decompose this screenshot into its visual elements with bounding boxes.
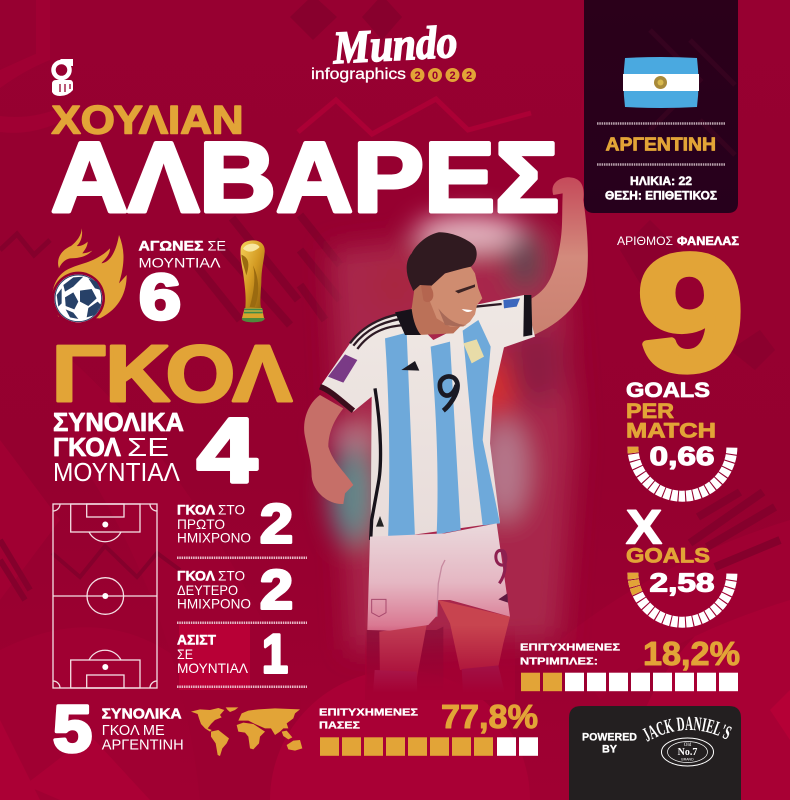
top hero: name bbox=[52, 59, 244, 142]
stat: expected goals: GOALS bbox=[626, 545, 710, 568]
stat: first half goals bbox=[177, 492, 293, 554]
jersey number: 9 bbox=[638, 221, 743, 404]
stat: successful passes: ΕΠΙΤΥΧΗΜΕΝΕΣ bbox=[319, 707, 418, 719]
gauge bbox=[633, 447, 732, 496]
stat: expected goals bbox=[626, 502, 732, 622]
progress squares bbox=[320, 737, 538, 756]
stat: goals per match: 0,66 bbox=[650, 441, 714, 471]
matches value: 6 bbox=[139, 261, 181, 333]
stat: goals per match: MATCH bbox=[626, 420, 716, 443]
logo: Mundo infographics 2022: 0 bbox=[432, 70, 438, 82]
jersey bbox=[320, 295, 535, 541]
total World Cup goals: ΣΕ bbox=[127, 432, 169, 462]
jersey number: ΑΡΙΘΜΟΣ bbox=[617, 236, 673, 248]
jersey number: ΦΑΝΕΛΑΣ bbox=[677, 236, 739, 248]
logo: Mundo infographics 2022: 2 bbox=[414, 70, 421, 82]
stat: total goals with Argentina bbox=[53, 692, 184, 766]
stat: successful dribbles: ΝΤΡΙΜΠΛΕΣ: bbox=[520, 656, 598, 668]
stat: successful passes bbox=[319, 698, 538, 756]
matches label: ΜΟΥΝΤΙΑΛ bbox=[138, 255, 221, 271]
stat: total goals with Argentina: 5 bbox=[53, 692, 92, 766]
gauge bbox=[633, 573, 732, 622]
hair bbox=[407, 232, 477, 291]
heading: goals: ΓΚΟΛ bbox=[52, 329, 292, 418]
logo: Mundo infographics 2022: Mundo bbox=[331, 16, 458, 73]
shirt number bbox=[440, 376, 458, 411]
stat: assists: 1 bbox=[262, 622, 288, 684]
stat: total goals with Argentina: ΓΚΟΛ ΜΕ bbox=[102, 722, 165, 739]
panel: country bbox=[584, 0, 738, 213]
logo: Jack Daniel's: BRAND bbox=[681, 758, 694, 762]
stat: goals per match bbox=[626, 379, 732, 496]
stat: second half goals: ΓΚΟΛ bbox=[177, 568, 216, 584]
matches label: ΑΓΩΝΕΣ bbox=[138, 238, 204, 254]
player photo bbox=[304, 177, 588, 700]
stat: first half goals: ΠΡΩΤΟ bbox=[177, 516, 225, 532]
stat: successful dribbles bbox=[520, 635, 740, 691]
stat: first half goals: ΣΤΟ bbox=[218, 502, 245, 518]
surname: ΑΛΒΑΡΕΣ bbox=[51, 122, 559, 232]
logo: Jack Daniel's bbox=[642, 716, 732, 766]
matches block bbox=[52, 228, 265, 333]
panel: sponsor bbox=[569, 706, 741, 800]
stat: first half goals: ΗΜΙΧΡΟΝΟ bbox=[177, 530, 251, 546]
age and position bbox=[605, 176, 717, 203]
stat: successful dribbles: 18,2% bbox=[643, 635, 740, 672]
stat: first half goals: ΓΚΟΛ bbox=[177, 502, 216, 518]
stat: assists: ΜΟΥΝΤΙΑΛ bbox=[177, 660, 249, 676]
stat: second half goals: ΗΜΙΧΡΟΝΟ bbox=[177, 596, 251, 612]
legs and shorts bbox=[367, 523, 510, 698]
progress squares bbox=[521, 673, 738, 691]
logo: Mundo infographics 2022: 2 bbox=[466, 70, 472, 82]
head bbox=[395, 232, 482, 335]
icon: World Cup trophy bbox=[240, 240, 265, 322]
icon: flag of Argentina bbox=[623, 57, 699, 108]
icon: world map bbox=[191, 707, 302, 756]
logo: Jack Daniel's: Old bbox=[684, 743, 692, 748]
logo: Jack Daniel's: JACK DANIEL'S bbox=[642, 716, 732, 742]
dividers bbox=[177, 558, 307, 687]
panel: sponsor: BY bbox=[602, 744, 618, 756]
stat: successful passes: 77,8% bbox=[441, 698, 538, 735]
country name: ΑΡΓΕΝΤΙΝΗ bbox=[606, 134, 716, 154]
icon: football pitch bbox=[53, 504, 157, 688]
total World Cup goals bbox=[53, 401, 257, 502]
stat: second half goals: 2 bbox=[260, 558, 293, 620]
age and position: ΘΕΣΗ: ΕΠΙΘΕΤΙΚΟΣ bbox=[605, 191, 717, 203]
left arm bbox=[304, 395, 353, 504]
stat: assists bbox=[177, 622, 288, 684]
stat: goals per match: PER bbox=[626, 400, 674, 423]
stat: total goals with Argentina: ΣΥΝΟΛΙΚΑ bbox=[102, 706, 182, 723]
photo fade bbox=[365, 625, 515, 700]
logo: g mark bbox=[52, 59, 73, 96]
total World Cup goals: ΜΟΥΝΤΙΑΛ bbox=[53, 457, 181, 487]
stat: expected goals: X bbox=[626, 502, 662, 554]
stat: first half goals: 2 bbox=[260, 492, 293, 554]
logo: Jack Daniel's: No.7 bbox=[678, 747, 697, 758]
stat: successful dribbles: ΕΠΙΤΥΧΗΜΕΝΕΣ bbox=[520, 642, 620, 654]
shorts bbox=[367, 523, 510, 631]
stat: second half goals: ΣΤΟ bbox=[218, 568, 245, 584]
stat: assists: ΣΕ bbox=[177, 646, 193, 662]
stat: goals per match: GOALS bbox=[626, 379, 710, 402]
icon: flaming football bbox=[52, 228, 127, 325]
stat: assists: ΑΣΙΣΤ bbox=[177, 632, 216, 648]
stat: expected goals: 2,58 bbox=[650, 568, 714, 598]
stat: successful passes: ΠΑΣΕΣ bbox=[319, 720, 360, 732]
total World Cup goals: ΓΚΟΛ bbox=[53, 432, 122, 462]
matches label: ΣΕ bbox=[208, 238, 226, 254]
blurred stadium background bbox=[325, 215, 575, 650]
age and position: ΗΛΙΚΙΑ: 22 bbox=[630, 176, 692, 188]
total World Cup goals: ΣΥΝΟΛΙΚΑ bbox=[53, 407, 184, 437]
first name: ΧΟΥΛΙΑΝ bbox=[52, 98, 244, 142]
collar bbox=[395, 309, 421, 335]
total World Cup goals: 4 bbox=[197, 401, 257, 502]
stat: second half goals bbox=[177, 558, 293, 620]
stat: second half goals: ΔΕΥΤΕΡΟ bbox=[177, 582, 238, 598]
panel: sponsor: POWERED bbox=[582, 732, 637, 744]
stat: total goals with Argentina: ΑΡΓΕΝΤΙΝΗ bbox=[102, 737, 184, 754]
matches label bbox=[138, 238, 226, 271]
logo: Mundo infographics 2022: infographics bbox=[311, 66, 406, 83]
logo: Mundo infographics 2022: 2 bbox=[449, 70, 456, 82]
raised arm bbox=[530, 177, 588, 337]
